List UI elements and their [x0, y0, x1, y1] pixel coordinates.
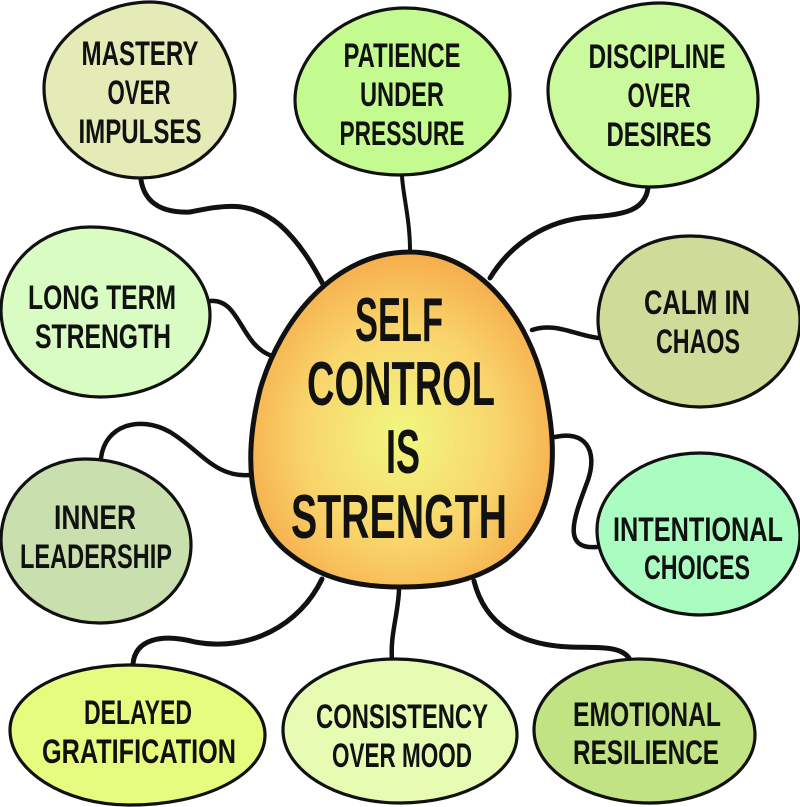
central title: CONTROL	[307, 350, 495, 419]
node: discipline over desires: DESIRES	[606, 116, 712, 154]
node: delayed gratification: DELAYED	[84, 694, 192, 732]
node: emotional resilience: EMOTIONAL	[573, 696, 721, 734]
node: discipline over desires: DISCIPLINE	[588, 38, 726, 76]
node: long term strength: STRENGTH	[35, 318, 171, 356]
central title: SELF	[355, 286, 443, 355]
node: consistency over mood: OVER MOOD	[332, 737, 472, 775]
connector lines	[101, 176, 648, 664]
node: intentional choices: CHOICES	[644, 549, 750, 587]
central title	[291, 286, 507, 552]
node: emotional resilience: RESILIENCE	[573, 734, 719, 772]
node: intentional choices	[597, 453, 800, 615]
node: long term strength: LONG TERM	[28, 279, 176, 317]
node: mastery over impulses: OVER	[108, 74, 170, 112]
node: delayed gratification	[10, 665, 265, 805]
node: delayed gratification: GRATIFICATION	[42, 733, 236, 771]
node: discipline over desires: OVER	[628, 77, 690, 115]
central node: self control is strength	[251, 252, 552, 587]
egg shape	[251, 252, 552, 587]
node: patience under pressure: PRESSURE	[340, 115, 464, 153]
central title: STRENGTH	[291, 483, 507, 552]
node: consistency over mood: CONSISTENCY	[316, 698, 488, 736]
node: inner leadership: LEADERSHIP	[20, 538, 172, 576]
node: patience under pressure: PATIENCE	[344, 37, 460, 75]
node: calm in chaos	[598, 236, 800, 407]
node: calm in chaos: CALM IN	[644, 284, 750, 322]
node: patience under pressure	[295, 8, 510, 175]
node: mastery over impulses: IMPULSES	[78, 113, 202, 151]
node: mastery over impulses	[44, 2, 235, 178]
node: emotional resilience	[534, 659, 755, 803]
node: consistency over mood	[283, 659, 517, 803]
node: inner leadership	[1, 459, 191, 623]
central title: IS	[386, 418, 420, 487]
node: discipline over desires	[548, 3, 758, 187]
node: long term strength	[1, 227, 210, 397]
node: patience under pressure: UNDER	[360, 76, 444, 114]
node: calm in chaos: CHAOS	[656, 323, 740, 361]
node: mastery over impulses: MASTERY	[82, 35, 199, 73]
node: inner leadership: INNER	[54, 499, 136, 537]
